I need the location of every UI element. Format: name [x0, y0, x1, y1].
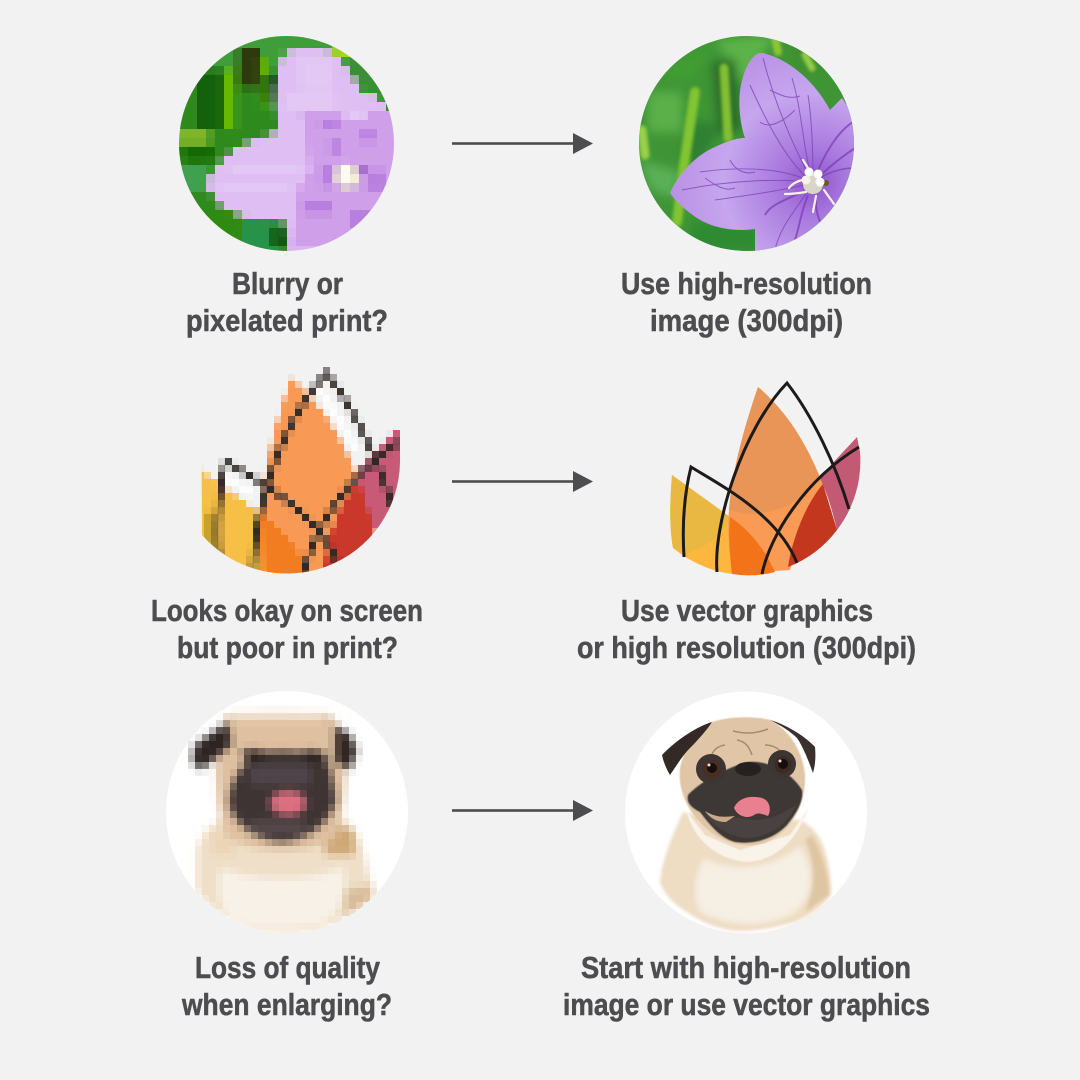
flower petals [670, 53, 860, 260]
pug collar [686, 808, 808, 862]
mottled pixels [302, 120, 385, 230]
caption: start with high resolution [563, 950, 930, 1022]
white circle [166, 691, 408, 933]
pixel mosaic pug [192, 712, 374, 934]
caption: looks okay on screen: Looks okay on screen [151, 593, 423, 628]
icon: pixelated lotus graphic [202, 367, 400, 574]
red petal [788, 484, 837, 567]
caption: looks okay on screen [151, 593, 423, 665]
flower background [639, 36, 854, 251]
caption: use high resolution image [621, 266, 872, 338]
right eye [768, 750, 796, 778]
caption: loss of quality [181, 950, 392, 1022]
forehead wrinkles [712, 729, 781, 755]
left eye [696, 754, 726, 784]
nose [735, 762, 761, 776]
yellow petal [670, 475, 732, 574]
caption: use high resolution image: image (300dpi) [650, 303, 843, 338]
muzzle [688, 762, 802, 843]
flower veins [682, 58, 855, 250]
left ear [662, 722, 712, 775]
icon: pixelated pug [166, 691, 408, 934]
pug chest [695, 846, 811, 924]
orange petal [728, 387, 823, 574]
arrow 2 [452, 471, 593, 492]
caption: blurry or pixelated: Blurry or [232, 266, 343, 301]
arrow 3 [452, 800, 593, 821]
caption: use vector graphics: or high resolution (300dpi) [577, 630, 916, 665]
white circle [625, 692, 867, 934]
caption: looks okay on screen: but poor in print? [177, 630, 398, 665]
flower stamens [785, 160, 834, 212]
caption: use vector graphics: Use vector graphics [621, 593, 873, 628]
arrow 1 [452, 133, 593, 154]
pink petal [820, 437, 860, 530]
caption: start with high resolution: Start with high-resolution [581, 950, 911, 985]
pug body [660, 812, 831, 931]
caption: start with high resolution: image or use vector graphics [563, 987, 930, 1022]
caption: blurry or pixelated: pixelated print? [186, 303, 388, 338]
right ear [770, 720, 815, 773]
tongue [734, 797, 770, 817]
caption: use vector graphics [577, 593, 916, 665]
lower lip and mouth [703, 805, 796, 838]
lotus outlines [683, 383, 859, 574]
icon: vector lotus graphic [670, 383, 860, 575]
caption: loss of quality: Loss of quality [195, 950, 381, 985]
caption: blurry or pixelated [186, 266, 388, 338]
caption: use high resolution image: Use high-resolution [621, 266, 872, 301]
icon: sharp pug [625, 692, 867, 934]
caption: loss of quality: when enlarging? [181, 987, 392, 1022]
icon: pixelated purple flower [179, 36, 394, 251]
icon: sharp purple flower [639, 36, 854, 251]
pug head [680, 717, 805, 845]
